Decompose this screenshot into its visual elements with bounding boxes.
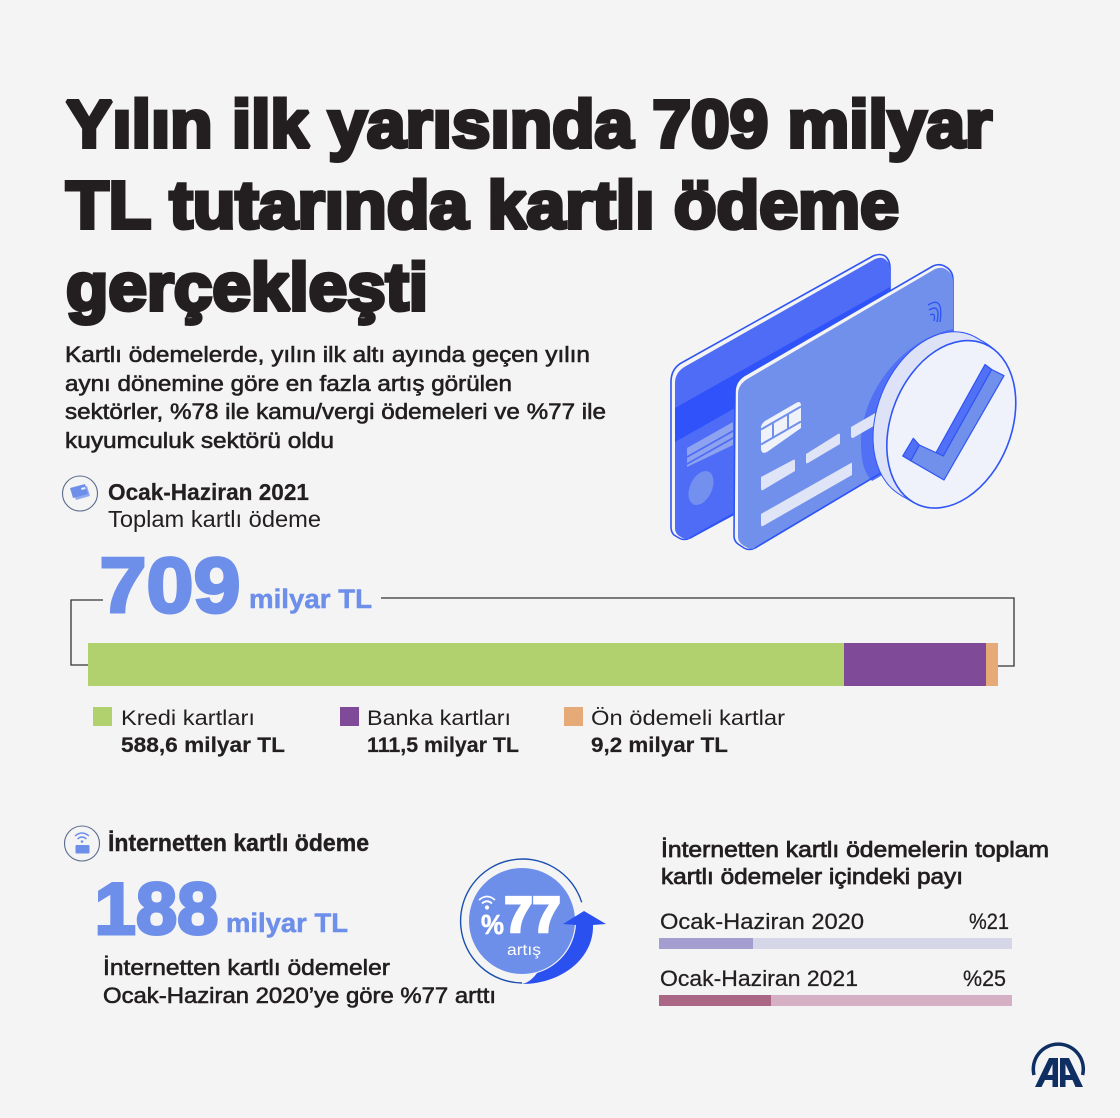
big number: 709 milyar TL: 709 <box>100 541 240 629</box>
title: Yılın ilk yarısında 709 milyar <box>66 88 992 162</box>
bar: 2020 share: Ocak-Haziran 2020 <box>660 909 864 934</box>
intro paragraph: sektörler, %78 ile kamu/vergi ödemeleri ve %77 ile <box>65 399 606 424</box>
bar: 2021 share: %25 <box>963 966 1006 991</box>
big number: 709 milyar TL: milyar TL <box>249 584 372 614</box>
illustration: credit cards with check mark <box>671 254 1040 550</box>
legend: prepaid cards: Ön ödemeli kartlar <box>591 707 785 730</box>
text: internet payments growth: Ocak-Haziran 2020’ye göre %77 arttı <box>103 983 496 1008</box>
heading: total card payment: Toplam kartlı ödeme <box>108 506 321 532</box>
legend: credit cards <box>93 707 285 757</box>
badge: 77 percent growth: artış <box>507 942 541 959</box>
intro paragraph: Kartlı ödemelerde, yılın ilk altı ayında geçen yılın <box>65 342 590 367</box>
legend: debit cards: Banka kartları <box>367 707 511 730</box>
bar: 2020 share: %21 <box>969 909 1009 934</box>
legend: debit cards: 111,5 milyar TL <box>367 734 519 757</box>
legend: prepaid cards: 9,2 milyar TL <box>591 734 728 757</box>
bar: 2020 share <box>659 909 1012 949</box>
arrow <box>522 911 606 984</box>
legend: credit cards: Kredi kartları <box>121 707 255 730</box>
legend: credit cards: 588,6 milyar TL <box>121 734 285 757</box>
check badge <box>850 313 1040 527</box>
front card <box>734 265 953 550</box>
contactless icon <box>928 302 941 322</box>
text: internet payments growth <box>103 955 496 1008</box>
big number: 188 milyar TL: 188 <box>94 869 218 950</box>
big number: 188 milyar TL: milyar TL <box>226 908 348 938</box>
heading: share of internet payments: kartlı ödemeler içindeki payı <box>661 864 963 889</box>
bar: 2021 share <box>659 966 1012 1006</box>
intro paragraph: aynı dönemine göre en fazla artış görülen <box>65 371 512 396</box>
intro paragraph <box>65 342 606 453</box>
circle shadow on card <box>861 329 953 481</box>
card details <box>761 408 884 526</box>
intro paragraph: kuyumculuk sektörü oldu <box>65 428 334 453</box>
heading: internet card payment: İnternetten kartlı ödeme <box>108 830 369 857</box>
check mark <box>903 364 1004 480</box>
legend: prepaid cards <box>564 707 785 757</box>
logo: AA <box>1033 1044 1083 1087</box>
big number: 709 milyar TL <box>100 541 372 629</box>
heading: total card payment: Ocak-Haziran 2021 <box>108 479 309 505</box>
heading: share of internet payments <box>661 837 1049 889</box>
text: internet payments growth: İnternetten kartlı ödemeler <box>103 955 390 980</box>
title: gerçekleşti <box>66 251 428 325</box>
bracket <box>71 598 1014 666</box>
icon: cards <box>62 476 98 511</box>
icon: wifi card <box>64 826 100 861</box>
title: TL tutarında kartlı ödeme <box>66 169 899 243</box>
bar: 2021 share: Ocak-Haziran 2021 <box>660 966 858 991</box>
title <box>66 88 992 325</box>
legend: debit cards <box>340 707 519 757</box>
stacked bar chart <box>88 643 998 686</box>
badge: 77 percent growth: % <box>481 909 504 940</box>
wifi glyph <box>479 896 495 909</box>
badge: 77 percent growth: 77 <box>504 887 560 943</box>
back card <box>671 254 890 540</box>
badge: 77 percent growth <box>461 859 606 984</box>
card chip <box>761 402 801 453</box>
heading: share of internet payments: İnternetten kartlı ödemelerin toplam <box>661 837 1049 862</box>
heading: total card payment <box>108 479 321 532</box>
big number: 188 milyar TL <box>94 869 348 950</box>
